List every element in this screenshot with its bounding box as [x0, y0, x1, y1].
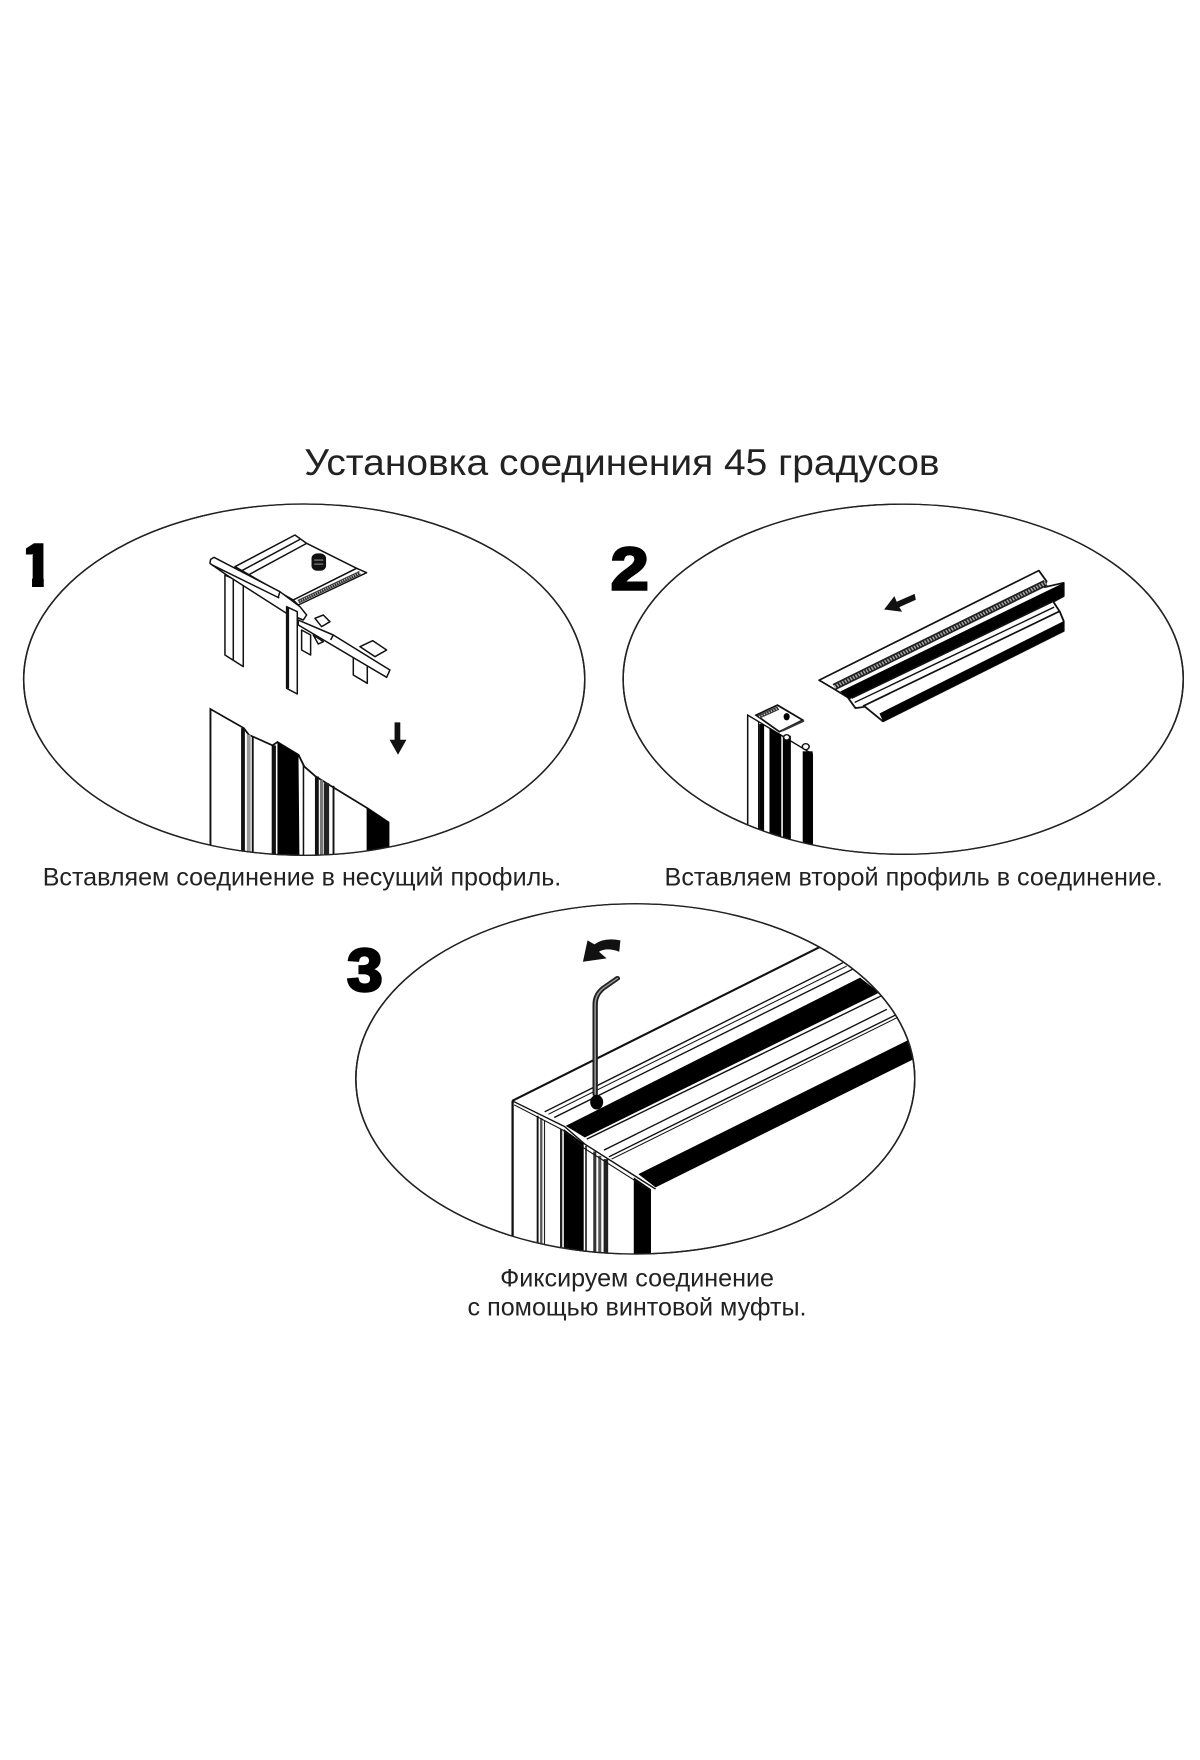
- caption: step 2: Вставляем второй профиль в соединение.: [665, 865, 1163, 892]
- icon: arrow left: [884, 594, 916, 612]
- vertical profile with connector: [746, 704, 814, 844]
- connector bracket: [210, 535, 390, 694]
- icon: set screw: [312, 553, 326, 571]
- mitred frame corner: [511, 945, 916, 1282]
- caption: step 3: [468, 1264, 807, 1322]
- panel: step 1: [24, 504, 585, 880]
- second profile: [819, 571, 1064, 721]
- step number 3: 3: [347, 936, 383, 1004]
- icon: hex key: [590, 978, 617, 1110]
- step number 1: 1: [20, 531, 53, 599]
- ellipse outline over profile: [24, 504, 585, 855]
- carrier profile: [210, 708, 390, 855]
- caption: step 3: Фиксируем соединение: [500, 1264, 774, 1292]
- ellipse outline over profile 2: [623, 504, 1183, 854]
- ellipse frame 3: [356, 904, 915, 1254]
- caption: step 3: с помощью винтовой муфты.: [468, 1294, 807, 1322]
- caption: step 1: Вставляем соединение в несущий профиль.: [43, 865, 561, 892]
- step number 2: 2: [611, 534, 649, 602]
- panel: step 3: [356, 904, 916, 1282]
- panel: step 2: [623, 504, 1183, 884]
- title: Установка соединения 45 градусов: [304, 441, 940, 483]
- ellipse frame 1: [24, 504, 585, 855]
- icon: curved rotation arrow: [583, 939, 620, 962]
- icon: arrow down: [390, 722, 406, 755]
- ellipse outline over corner: [356, 904, 915, 1254]
- ellipse frame 2: [623, 504, 1183, 854]
